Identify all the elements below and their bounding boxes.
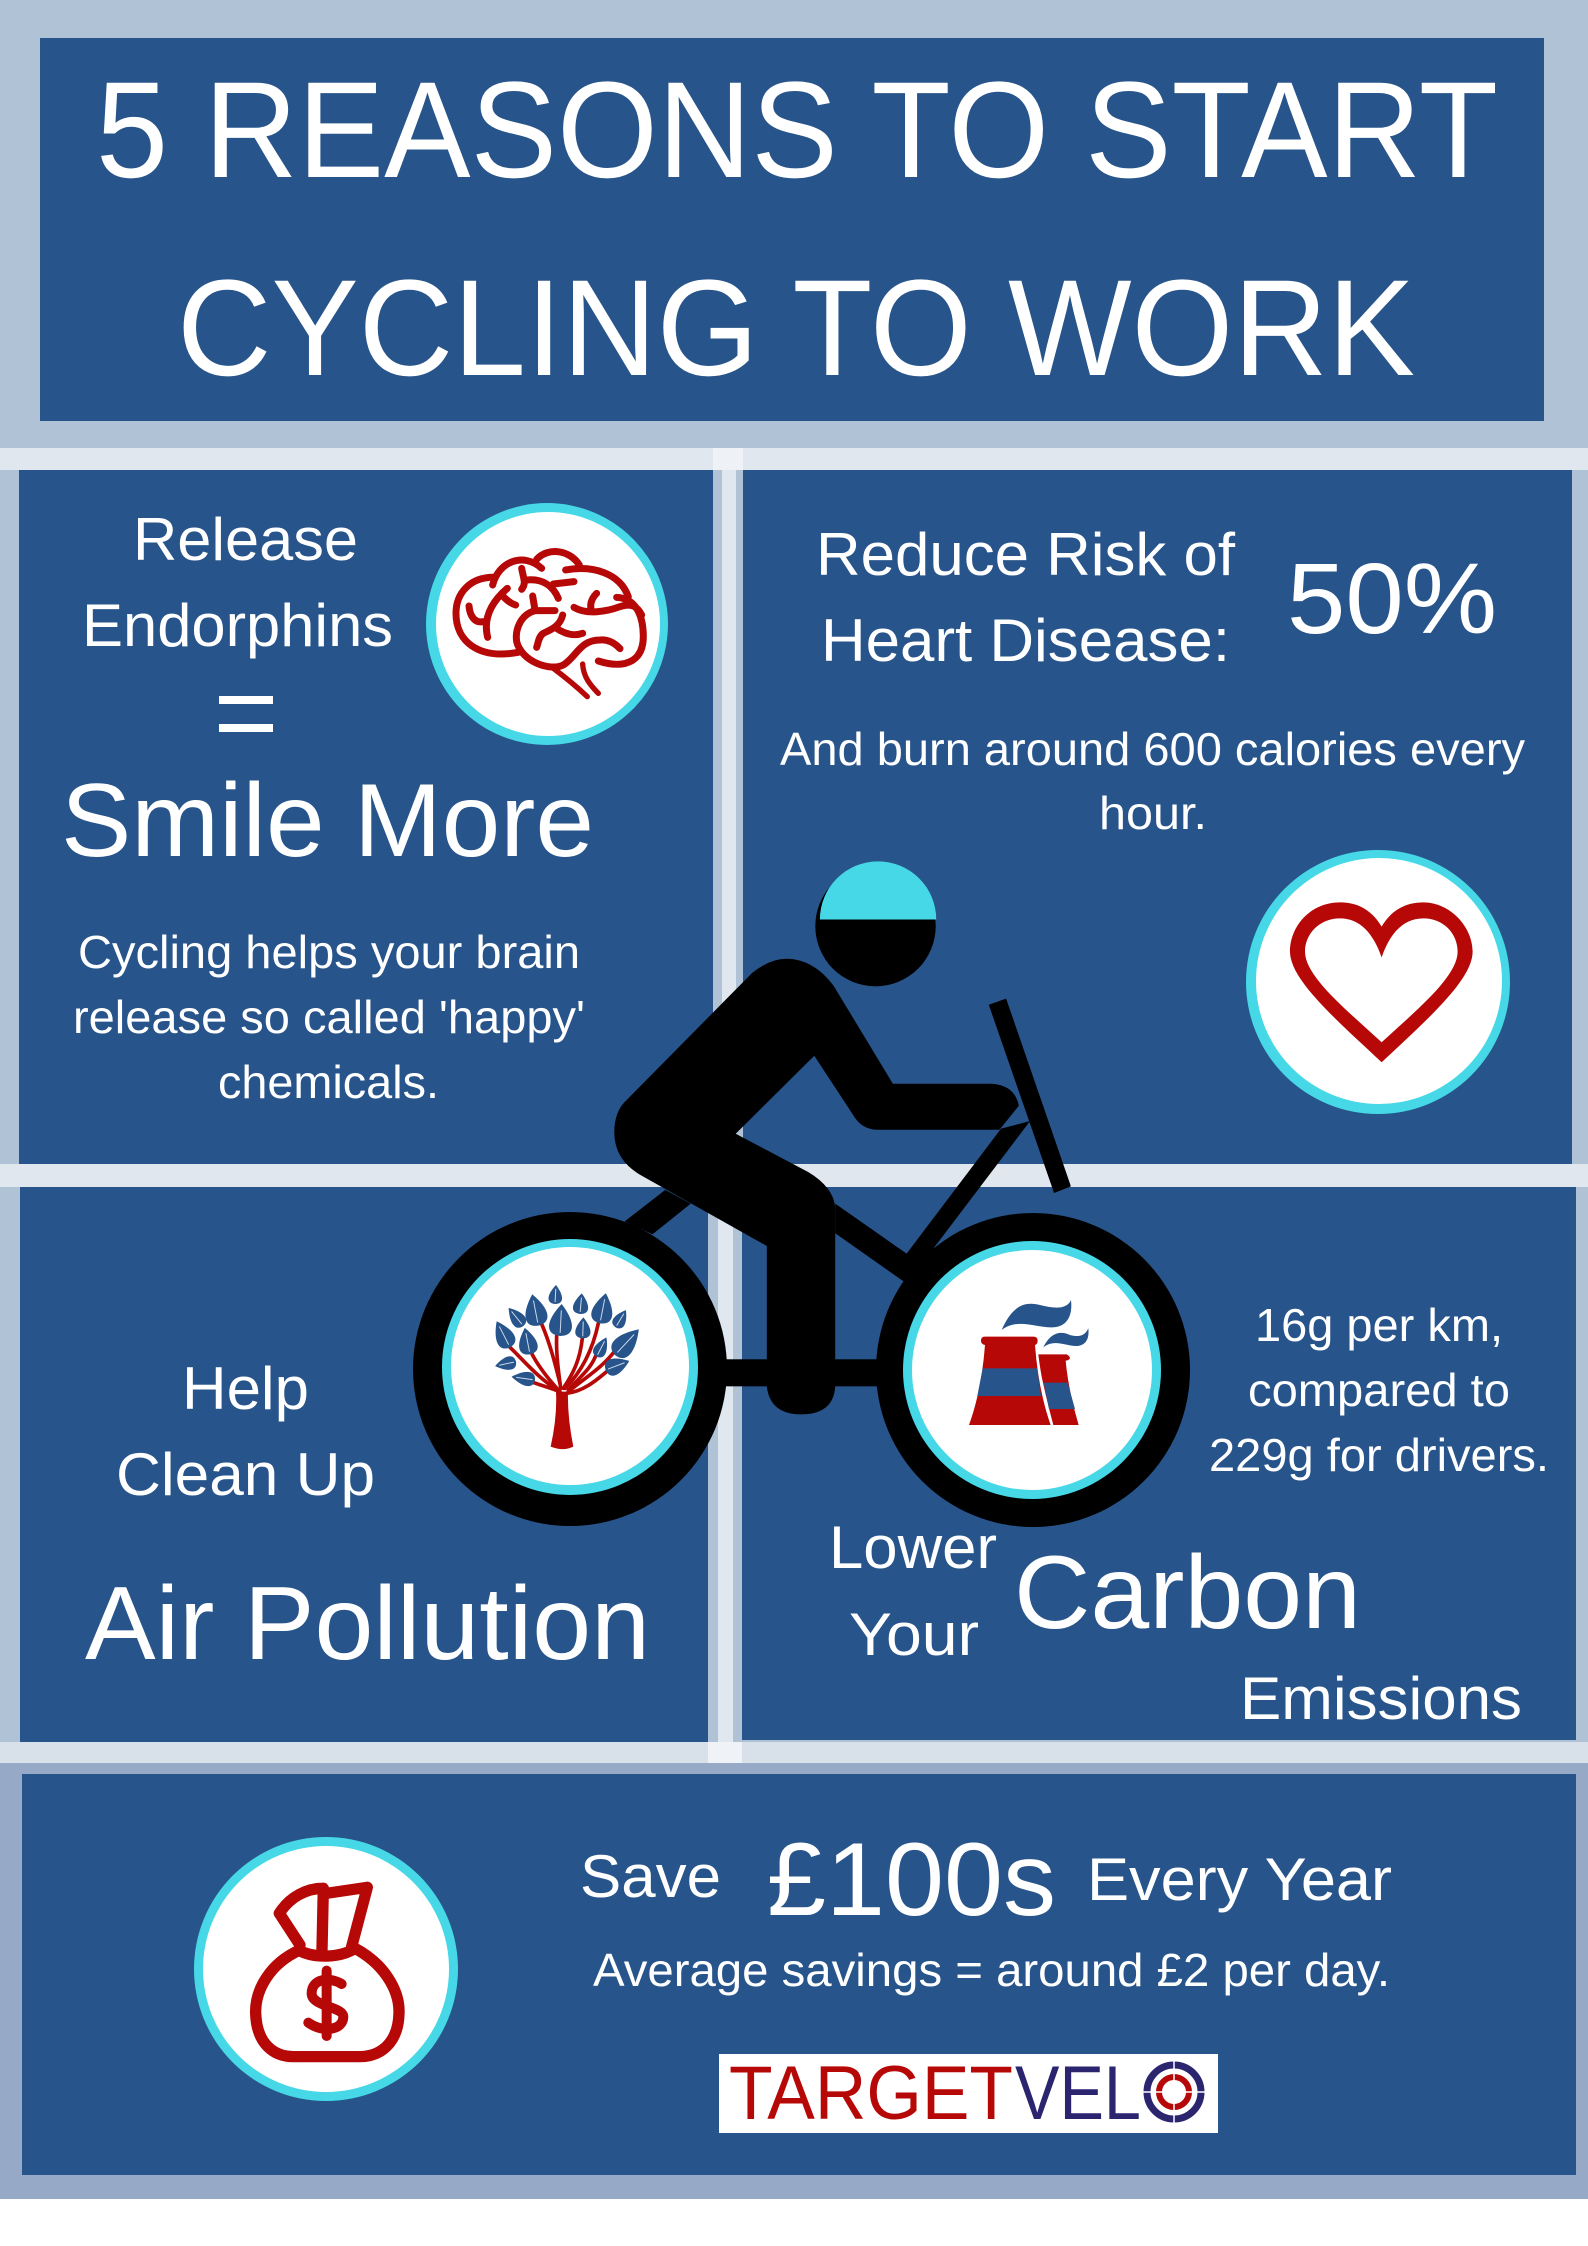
helmet [820, 861, 936, 919]
body text: chemicals. [218, 1056, 439, 1108]
body text: hour. [1099, 787, 1207, 839]
panel: heart disease [743, 470, 1572, 1164]
icon: brain [426, 503, 668, 745]
icon: money bag [194, 1837, 458, 2101]
body text [1209, 1299, 1549, 1481]
text: save: Save [580, 1843, 721, 1910]
body text [780, 723, 1525, 839]
panel: air pollution [20, 1187, 708, 1742]
heading: lower your [829, 1514, 997, 1668]
bicycle frame [624, 999, 1071, 1386]
heading: carbon: Carbon [1014, 1535, 1361, 1651]
heading: lower your: Lower [829, 1514, 997, 1581]
title line 1: 5 REASONS TO START [96, 54, 1498, 207]
panel: smile more [19, 470, 713, 1164]
title banner [40, 38, 1544, 421]
right wheel with factory icon [876, 1213, 1190, 1527]
body text: Cycling helps your brain [78, 926, 580, 978]
body text: 16g per km, [1255, 1299, 1503, 1351]
logo: targetvelo [719, 2051, 1218, 2136]
heading line 2: Heart Disease: [821, 607, 1230, 674]
heading: smile more: Smile More [61, 763, 594, 879]
rider body [614, 959, 1019, 1414]
body text: Average savings = around £2 per day. [593, 1944, 1390, 1996]
panel: savings [22, 1774, 1576, 2175]
body text: release so called 'happy' [73, 991, 585, 1043]
heading line 2: Endorphins [82, 592, 393, 659]
heading: help clean up: Help [182, 1355, 309, 1422]
heading: lower your: Your [849, 1601, 979, 1668]
heading: help clean up: Clean Up [116, 1441, 375, 1508]
stat: 100s pounds: £100s [767, 1822, 1056, 1938]
title line 2: CYCLING TO WORK [177, 252, 1415, 405]
heading: release endorphins: Release [133, 506, 358, 573]
left wheel with tree icon [413, 1212, 727, 1526]
heading: help clean up [116, 1355, 375, 1508]
icon: heart [1246, 850, 1510, 1114]
heading: air pollution: Air Pollution [85, 1566, 650, 1682]
heading: emissions: Emissions [1240, 1665, 1522, 1732]
illustration: cyclist on bicycle [413, 861, 1190, 1527]
heading: reduce risk: Reduce Risk of [816, 521, 1235, 588]
logo: targetvelo: VEL [1015, 2051, 1141, 2136]
body text: 229g for drivers. [1209, 1429, 1549, 1481]
logo: targetvelo: TARGET [729, 2051, 1013, 2136]
body text: And burn around 600 calories every [780, 723, 1525, 775]
text: every year: Every Year [1087, 1846, 1392, 1913]
body text: compared to [1248, 1364, 1510, 1416]
equals sign [219, 696, 273, 732]
panel: carbon emissions [742, 1187, 1576, 1740]
rider head [815, 866, 936, 986]
stat: 50%: 50% [1287, 543, 1497, 655]
body text [73, 926, 585, 1108]
